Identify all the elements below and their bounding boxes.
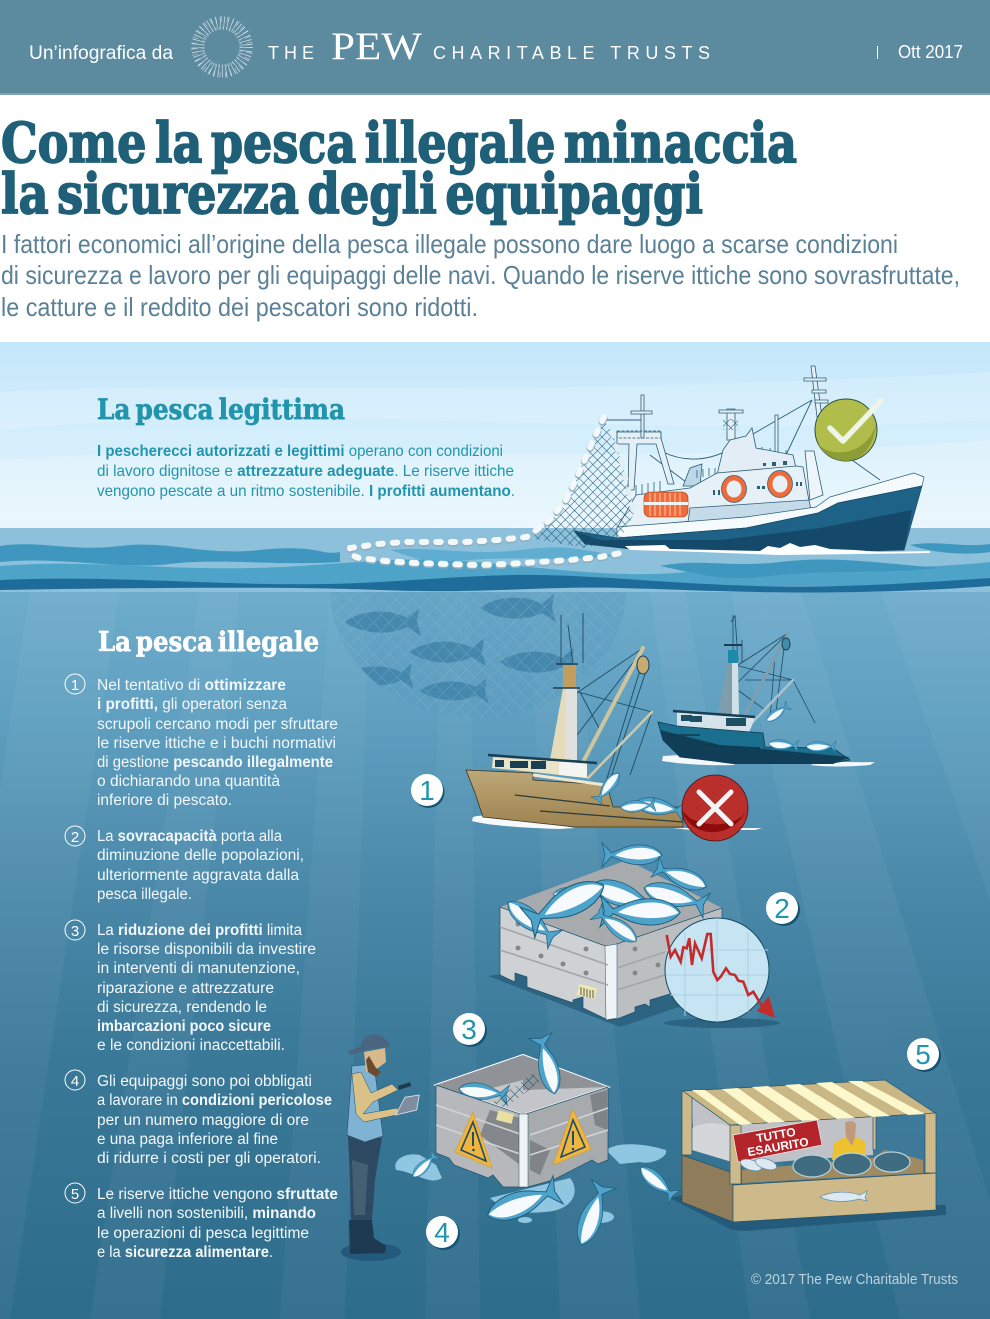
date: Ott 2017	[898, 42, 963, 62]
net ball under the surface	[330, 592, 626, 718]
boots	[349, 1220, 386, 1254]
text item 3: di sicurezza, rendendo le	[97, 999, 267, 1016]
life raft	[644, 492, 688, 517]
text item 2: La sovracapacità porta alla	[97, 828, 282, 845]
counter left side	[682, 1155, 733, 1222]
trousers	[348, 1136, 382, 1220]
number 2	[65, 826, 85, 846]
text item 3: e le condizioni inaccettabili.	[97, 1037, 285, 1054]
background: underwater with light rays	[0, 585, 990, 1319]
railings	[636, 447, 786, 495]
superstructure	[617, 428, 823, 528]
illustration: fisherman	[341, 1034, 419, 1261]
barcode	[496, 1110, 514, 1124]
crate left face	[436, 1085, 523, 1187]
text item 1: Nel tentativo di ottimizzare	[97, 677, 286, 694]
life ring	[768, 470, 792, 498]
text item 4: di ridurre i costi per gli operatori.	[97, 1150, 321, 1167]
arms	[352, 1072, 401, 1122]
illustration: legal trawler with net	[349, 366, 930, 566]
crate right face	[608, 908, 722, 1020]
text item 3: in interventi di manutenzione,	[97, 960, 300, 977]
badge 1	[411, 774, 444, 808]
sign	[733, 1120, 822, 1162]
tower	[718, 644, 742, 715]
bowls	[793, 1152, 910, 1177]
crate details	[516, 922, 660, 976]
text item 4: Gli equipaggi sono poi obbligati	[97, 1073, 312, 1090]
fish on counter	[820, 1191, 867, 1201]
text item 1: o dichiarando una quantità	[97, 773, 280, 790]
catch on deck	[763, 701, 836, 753]
number 1: 1	[71, 677, 79, 694]
corner post	[519, 1114, 528, 1187]
intro text: I fattori economici all’origine della pesca illegale possono dare luogo a scarse condizioni	[1, 229, 898, 259]
text item 2: ulteriormente aggravata dalla	[97, 867, 299, 884]
crate right face	[523, 1087, 608, 1187]
header label: Un’infografica da	[29, 42, 173, 64]
stern frame	[617, 395, 702, 490]
shadow	[341, 1243, 401, 1261]
header bar	[0, 0, 990, 95]
text item 5: a livelli non sostenibili, minando	[97, 1205, 316, 1222]
rigging	[730, 615, 815, 723]
text item 4: per un numero maggiore di ore	[97, 1112, 309, 1129]
text item 4	[65, 1070, 332, 1167]
number 1	[65, 674, 85, 694]
shadow	[670, 1195, 946, 1231]
radar mast grille	[723, 419, 738, 430]
counter top	[742, 1150, 923, 1183]
text item 2	[65, 826, 304, 903]
text item 3: La riduzione dei profitti limita	[97, 922, 302, 939]
text item 2: pesca illegale.	[97, 886, 192, 903]
shirt	[347, 1064, 383, 1142]
text item 4: a lavorare in condizioni pericolose	[97, 1092, 332, 1109]
intro text: le catture e il reddito dei pescatori sono ridotti.	[1, 292, 478, 322]
text item 3: imbarcazioni poco sicure	[97, 1018, 271, 1035]
seller	[832, 1121, 866, 1160]
foam	[625, 543, 930, 555]
wear marks	[480, 1090, 607, 1175]
number 4	[65, 1070, 85, 1090]
text: legal fishing: di lavoro dignitose e attrezzature adeguate. Le riserve ittiche	[97, 463, 514, 480]
illustration: crate full of fish	[488, 843, 780, 1028]
masts	[719, 366, 828, 455]
tablet	[396, 1095, 419, 1115]
head	[364, 1048, 386, 1072]
heading: La pesca legittima: La pesca legittima	[97, 393, 345, 426]
puddles	[395, 1144, 666, 1223]
icon: red X	[682, 775, 748, 841]
counter front	[733, 1173, 936, 1222]
text item 1: le riserve ittiche e i buchi normativi	[97, 735, 336, 752]
chart shadow	[664, 1018, 780, 1028]
intro text	[1, 229, 960, 322]
cabin	[673, 711, 755, 735]
cabin	[488, 755, 597, 778]
icon: green check	[815, 399, 881, 461]
text item 5: e la sicurezza alimentare.	[97, 1244, 273, 1261]
hull white band	[617, 473, 924, 538]
rigging	[600, 400, 880, 485]
text item 1: i profitti, gli operatori senza	[97, 696, 287, 713]
number 5	[65, 1183, 85, 1203]
fish in crate	[457, 1033, 566, 1108]
text item 5: Le riserve ittiche vengono sfruttate	[97, 1186, 338, 1203]
life ring	[722, 476, 746, 502]
title: la sicurezza degli equipaggi	[1, 161, 703, 226]
badge 4	[426, 1216, 460, 1250]
hull	[658, 722, 850, 763]
masts and rigging	[561, 613, 652, 785]
title: Come la pesca illegale minaccia	[1, 110, 797, 175]
awning	[683, 1080, 935, 1125]
text: legal fishing	[97, 443, 515, 500]
text item 3	[65, 920, 316, 1054]
heading: La pesca illegale: La pesca illegale	[98, 627, 319, 658]
logo wordmark: CHARITABLE TRUSTS	[433, 43, 710, 63]
booms	[583, 648, 652, 778]
number 3: 3	[71, 923, 79, 940]
crate left face	[500, 907, 608, 1020]
text item 1: scrupoli cercano modi per sfruttare	[97, 716, 338, 733]
text item 5: le operazioni di pesca legittime	[97, 1225, 309, 1242]
warning sign	[455, 1112, 492, 1168]
number 3	[65, 920, 85, 940]
logo wordmark: PEW	[331, 25, 422, 68]
badge 5: 5	[915, 1039, 931, 1070]
back wall	[690, 1095, 873, 1165]
posts	[682, 1091, 936, 1184]
background: sky	[0, 342, 990, 532]
text item 3: riparazione e attrezzature	[97, 980, 274, 997]
text item 1: inferiore di pescato.	[97, 792, 232, 809]
illustration: tan illegal boat	[466, 613, 762, 830]
badge 2: 2	[774, 893, 790, 924]
logo wordmark: THE	[268, 43, 314, 63]
logo: Pew sunburst	[194, 19, 250, 75]
sign: ESAURITO	[746, 1135, 810, 1159]
fish on display	[739, 1156, 778, 1173]
crate shadow	[488, 960, 700, 1027]
foam	[472, 815, 762, 830]
warning sign	[553, 1109, 591, 1165]
booms	[745, 633, 793, 728]
barcode	[577, 984, 597, 999]
sign: TUTTO	[755, 1125, 797, 1145]
badge 4: 4	[434, 1217, 450, 1248]
text item 5	[65, 1183, 338, 1261]
copyright: © 2017 The Pew Charitable Trusts	[751, 1272, 958, 1288]
foam	[662, 755, 875, 766]
text item 4: e una paga inferiore al fine	[97, 1131, 278, 1148]
illustration: worn crate with warnings	[395, 1033, 680, 1249]
number 5: 5	[71, 1186, 79, 1203]
badge 1: 1	[419, 775, 435, 806]
text: legal fishing: vengono pescate a un ritmo sostenibile. I profitti aumentano.	[97, 483, 515, 500]
text item 1	[65, 674, 338, 809]
title	[1, 110, 797, 226]
fish pile	[500, 843, 710, 949]
illustration: dark blue illegal boat	[658, 615, 875, 766]
number 2: 2	[71, 829, 79, 846]
number 4: 4	[71, 1073, 79, 1090]
text item 3: le risorse disponibili da investire	[97, 941, 316, 958]
badge 5	[907, 1038, 941, 1072]
hull blue	[574, 486, 922, 553]
cap	[347, 1034, 390, 1055]
corner post	[605, 944, 617, 1020]
badge 2	[766, 892, 800, 926]
catch	[591, 769, 686, 821]
spilled fish	[408, 1150, 680, 1249]
hull	[466, 770, 683, 827]
sea surface and waves	[0, 528, 990, 592]
net	[530, 420, 636, 548]
phone	[398, 1082, 411, 1090]
text item 1: di gestione pescando illegalmente	[97, 754, 333, 771]
logo wordmark	[268, 25, 710, 68]
float line	[349, 417, 633, 566]
badge 3: 3	[461, 1014, 477, 1045]
bridge windows	[713, 461, 802, 495]
illustration: market stall	[670, 1080, 946, 1231]
tower	[550, 664, 580, 760]
text: legal fishing: I pescherecci autorizzati e legittimi operano con condizioni	[97, 443, 503, 460]
crate inside	[436, 1055, 608, 1115]
badge 3	[453, 1013, 487, 1047]
text item 2: diminuzione delle popolazioni,	[97, 847, 304, 864]
chart: falling catch	[665, 918, 775, 1022]
crate back inside	[500, 860, 722, 947]
